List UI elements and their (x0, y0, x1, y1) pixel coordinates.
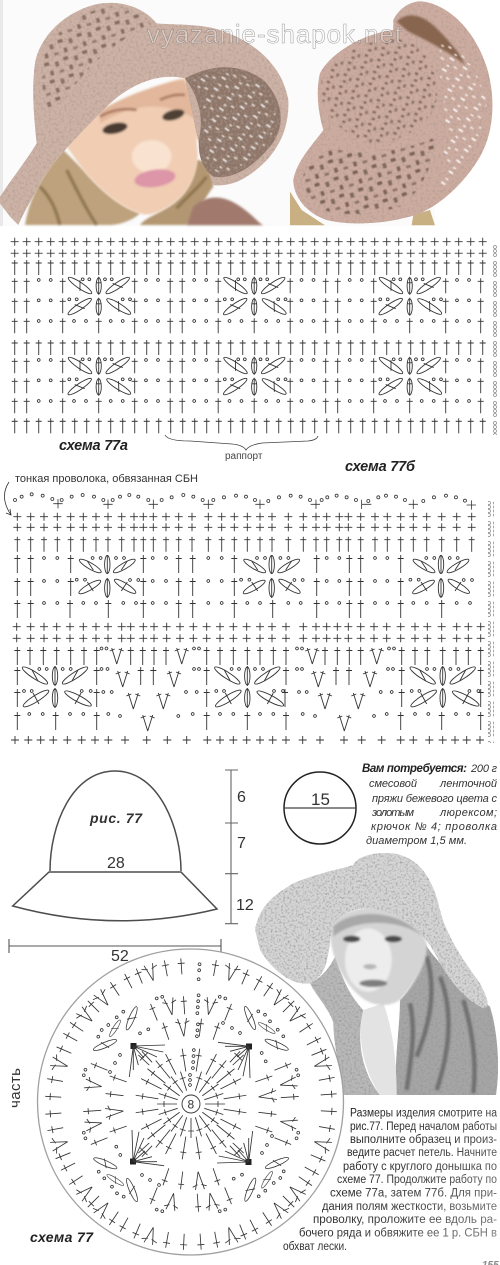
tall stitch rows (9, 260, 489, 433)
caption: схема 77: схема 77 (30, 1229, 94, 1245)
text: instructions: обхват лески. (283, 1241, 347, 1253)
hat silhouette (0, 3, 288, 225)
diagram: crown circle 15 (284, 772, 356, 844)
brace: раппорт (165, 435, 318, 450)
lower rows stitches (14, 667, 484, 731)
text: instructions (283, 1108, 498, 1253)
crown holes (321, 38, 437, 143)
left hair (310, 957, 380, 1095)
text: materials: крючок № 4; проволка (371, 821, 497, 833)
height ruler (225, 770, 238, 924)
pattern blocks top (12, 274, 484, 333)
bottom single crochet row (11, 736, 484, 744)
diagram: crown circle 15: 15 (311, 790, 330, 809)
hat (255, 853, 488, 1008)
text: materials: люрексом; (439, 807, 497, 819)
text: instructions: дания полям жесткости, возьмите (322, 1201, 497, 1213)
text: materials: Вам потребуется: (362, 763, 467, 775)
lower brim holes (300, 137, 437, 214)
face (330, 908, 427, 1005)
row with shells (14, 647, 484, 665)
dimension labels: 6 (237, 789, 246, 806)
label: раппорт: раппорт (225, 451, 263, 462)
pattern blocks bottom (12, 354, 484, 413)
text: materials: ленточной (439, 778, 497, 790)
center circle 8 (182, 1095, 200, 1113)
text: instructions: бочего ряда и обвяжите ее 1 р. СБН в (299, 1228, 497, 1240)
face (67, 78, 198, 215)
dimension labels: 7 (237, 835, 246, 852)
text: materials: 200 г (470, 763, 498, 775)
right hair and jacket (396, 943, 498, 1095)
third upper row (14, 600, 471, 618)
text: instructions: схеме 77а, затем 77б. Для при- (330, 1188, 497, 1200)
label: рис. 77: рис. 77 (89, 810, 143, 826)
watermark: vyazanie-shapok.net (147, 19, 403, 49)
single crochet rows (9, 236, 489, 259)
text: instructions: выполните образец и произ- (350, 1134, 497, 1146)
hair under the hat (25, 150, 213, 225)
outer ring (38, 949, 344, 1255)
crown (50, 771, 181, 871)
top single crochet rows (13, 513, 476, 531)
chart: circular crown schema 77 (38, 949, 344, 1255)
panel: crochet chart 77б (11, 493, 494, 744)
note: thin wire: тонкая проволока, обвязанная СБН (15, 473, 198, 485)
text: instructions: работу с круглого донышка по (343, 1161, 497, 1173)
lower motifs (21, 665, 480, 709)
dimension labels (107, 789, 254, 965)
inner dark brim (397, 15, 465, 65)
arrow: wire to row (4, 482, 11, 515)
right brim holes (440, 37, 487, 190)
scallop edge (13, 493, 476, 510)
caption: схема 77б: схема 77б (345, 459, 416, 475)
upper motifs (75, 555, 473, 598)
text: instructions: проволку, проложите ее вдоль ра- (313, 1214, 497, 1226)
chain edge column (488, 498, 494, 743)
upper motif rows stitches (14, 555, 404, 596)
middle single crochet rows (13, 623, 485, 642)
text: materials: диаметром 1,5 мм. (366, 835, 467, 847)
text: materials (362, 763, 498, 847)
chain edge column (492, 245, 498, 435)
hat brim underside (185, 67, 281, 177)
text: materials: золотым (371, 807, 414, 819)
panel: crochet chart 77а (9, 236, 498, 435)
hair streaks (407, 957, 475, 1093)
width ruler (9, 939, 221, 953)
dimension labels: 52 (111, 948, 129, 965)
photo: woman in hat, black and white (255, 853, 498, 1095)
dimension labels: 28 (107, 855, 125, 872)
dimension labels: 12 (236, 897, 254, 914)
center circle 8: 8 (188, 1098, 194, 1112)
tall stitch row (14, 537, 475, 552)
hat crown holes (42, 6, 152, 109)
photo: woman in crochet hat, front view (0, 0, 290, 226)
text: materials: смесовой (369, 778, 417, 790)
text: materials: пряжи бежевого цвета с (372, 793, 498, 805)
brim (13, 872, 217, 921)
shoulder (187, 198, 263, 225)
scarf (361, 1003, 397, 1095)
caption: схема 77а: схема 77а (59, 438, 128, 454)
photo: hat seen from behind (290, 0, 492, 226)
label: часть: часть (7, 1068, 24, 1108)
diagram: hat pattern рис. 77 (9, 770, 238, 953)
stitches (45, 958, 337, 1250)
